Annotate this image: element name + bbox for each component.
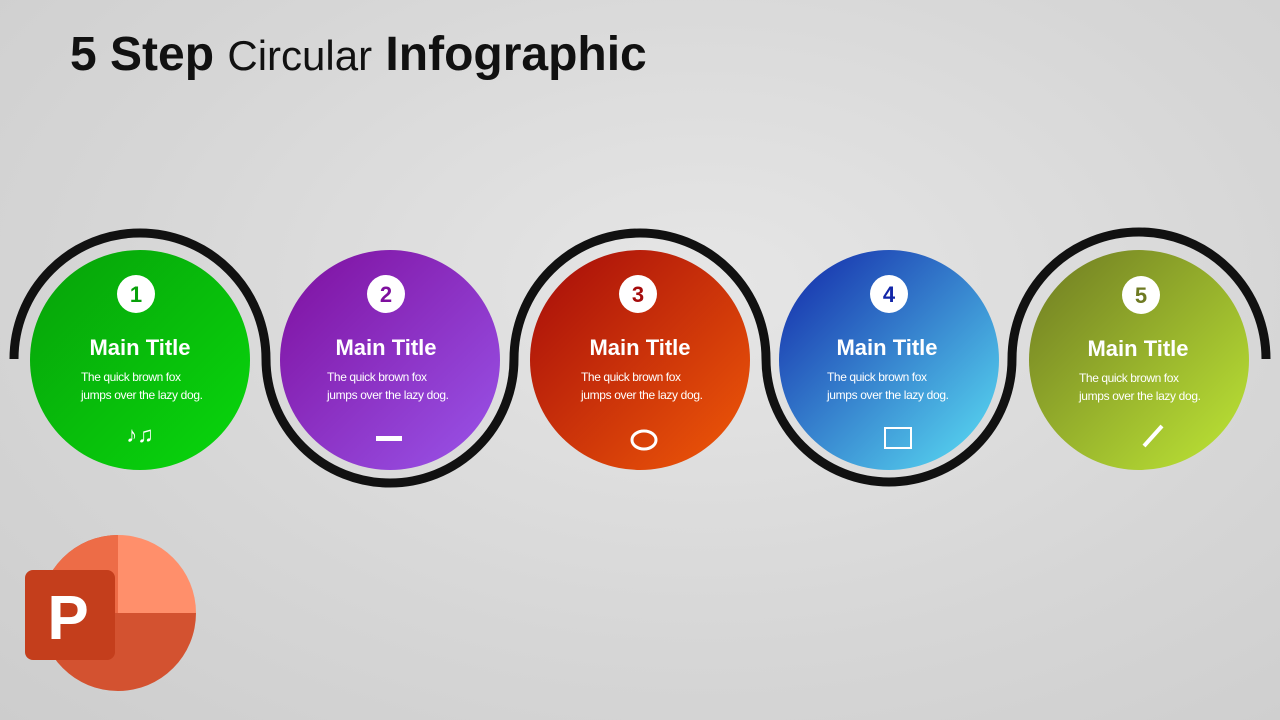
step 1 (30, 250, 250, 470)
step 1: The quick brown fox (81, 370, 181, 384)
step 4: jumps over the lazy dog. (826, 388, 949, 402)
step 3 (530, 250, 750, 470)
powerpoint logo: P (47, 584, 89, 653)
step 2: The quick brown fox (327, 370, 427, 384)
step 2: jumps over the lazy dog. (326, 388, 449, 402)
step 1: 1 (130, 282, 142, 307)
step 1: ♪♫ (126, 422, 154, 447)
step 4 (779, 250, 999, 470)
powerpoint logo (25, 535, 196, 691)
step 3: Main Title (589, 335, 691, 360)
step 2: 2 (380, 282, 392, 307)
wave path (14, 232, 1266, 483)
step 5: The quick brown fox (1079, 371, 1179, 385)
step 3: jumps over the lazy dog. (580, 388, 703, 402)
step 3: The quick brown fox (581, 370, 681, 384)
step 5: 5 (1135, 283, 1147, 308)
step 2 (280, 250, 500, 470)
step 5 (1029, 250, 1249, 470)
title: 5 Step Circular Infographic (70, 28, 647, 81)
step 5: Main Title (1087, 336, 1189, 361)
step 4: 4 (883, 282, 896, 307)
step 1: jumps over the lazy dog. (80, 388, 203, 402)
step 5: jumps over the lazy dog. (1078, 389, 1201, 403)
step 1: Main Title (89, 335, 191, 360)
step 2: Main Title (335, 335, 437, 360)
step 4: The quick brown fox (827, 370, 927, 384)
step 4: Main Title (836, 335, 938, 360)
step 3: 3 (632, 282, 644, 307)
